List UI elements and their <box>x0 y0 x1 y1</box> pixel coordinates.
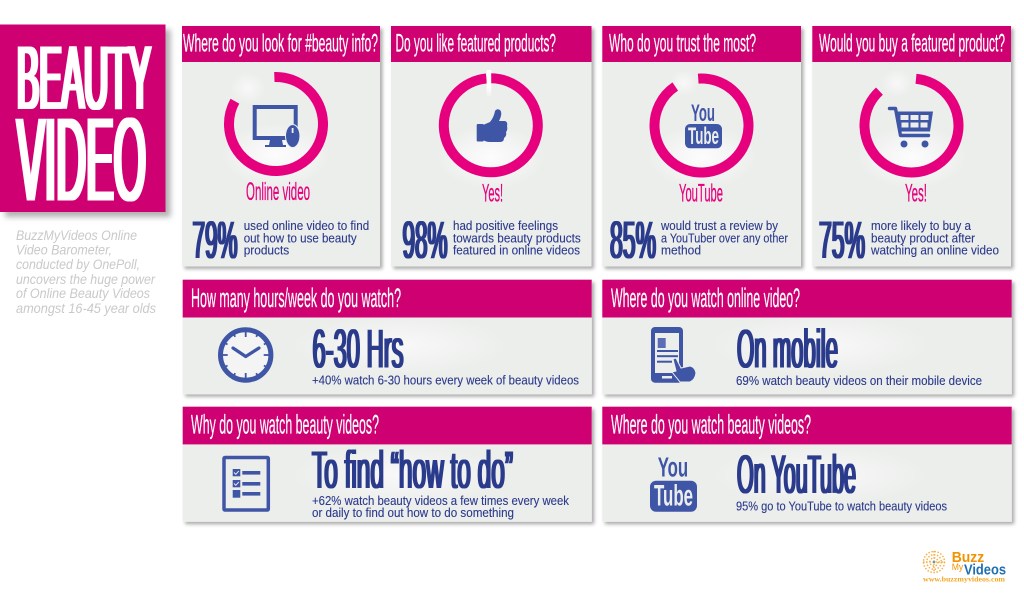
panel: do you like featured products <box>391 26 592 270</box>
icon: YouTube logo: Tube <box>654 480 693 513</box>
stat description: method <box>661 242 701 258</box>
stat description: beauty product after <box>871 230 976 246</box>
panel: where do you look for beauty info: Online video <box>246 178 310 206</box>
panel: where do you watch beauty videos <box>602 407 1012 522</box>
panel: where do you look for beauty info: 79% <box>192 211 238 270</box>
panel: who do you trust the most: Who do you trust the most? <box>609 30 756 58</box>
panel: where do you watch online video: On mobile <box>737 318 838 380</box>
icon: phone with tapping hand <box>651 327 696 383</box>
stat description: a YouTuber over any other <box>661 230 789 246</box>
donut ring 75% <box>860 74 963 177</box>
icon: YouTube logo: You <box>658 452 688 483</box>
stat description: +62% watch beauty videos a few times every week <box>312 493 569 508</box>
icon: dotted globe <box>923 551 945 573</box>
icon: YouTube logo <box>685 100 722 150</box>
panel: would you buy a featured product <box>812 26 1011 270</box>
logo: BuzzMyVideos <box>923 549 1006 584</box>
intro text: Video Barometer, <box>16 242 112 258</box>
icon: checklist <box>224 458 268 510</box>
intro text: uncovers the huge power <box>16 271 156 287</box>
panel: who do you trust the most <box>602 26 801 270</box>
stat description: products <box>244 242 290 258</box>
panel: do you like featured products: Do you like featured products? <box>396 30 556 58</box>
text: VIDEO <box>17 94 146 226</box>
stat description <box>660 218 789 258</box>
intro text: BuzzMyVideos Online <box>16 227 137 243</box>
stat description: +40% watch 6-30 hours every week of beauty videos <box>312 372 579 388</box>
stat description: towards beauty products <box>453 230 581 246</box>
title block <box>0 24 166 226</box>
stat description: watching an online video <box>870 242 999 258</box>
panel: how many hours per week: How many hours/week do you watch? <box>191 283 401 313</box>
stat description <box>870 218 999 258</box>
donut ring 85% <box>651 75 752 176</box>
icon: YouTube logo <box>650 452 697 513</box>
panel: who do you trust the most: YouTube <box>679 180 723 208</box>
logo: BuzzMyVideos: www.buzzmyvideos.com <box>923 575 1006 584</box>
intro text: amongst 16-45 year olds <box>16 300 156 316</box>
stat description: 69% watch beauty videos on their mobile device <box>736 373 982 388</box>
panel: where do you look for beauty info <box>182 26 380 270</box>
panel: do you like featured products: 98% <box>402 211 448 270</box>
intro text: conducted by OnePoll, <box>16 256 140 272</box>
logo: BuzzMyVideos: Videos <box>964 561 1006 578</box>
panel: how many hours per week: 6-30 Hrs <box>312 318 404 380</box>
panel: why do you watch beauty videos: To find “how to do” <box>312 441 513 500</box>
icon: YouTube logo: You <box>691 100 715 127</box>
text: BEAUTY <box>17 28 151 129</box>
panel: would you buy a featured product: Yes! <box>905 180 927 208</box>
donut ring 79% <box>227 75 325 173</box>
stat description: would trust a review by <box>660 218 778 233</box>
stat description: had positive feelings <box>453 218 558 233</box>
stat description: 95% go to YouTube to watch beauty videos <box>736 498 947 514</box>
icon: clock <box>220 330 271 380</box>
logo: BuzzMyVideos: Buzz <box>952 549 984 566</box>
icon: computer monitor and mouse <box>255 107 300 148</box>
panel: who do you trust the most: 85% <box>610 211 656 270</box>
panel: do you like featured products: Yes! <box>482 180 503 208</box>
stat description <box>453 218 581 258</box>
stat description <box>312 493 569 520</box>
panel: why do you watch beauty videos: Why do you watch beauty videos? <box>191 410 379 440</box>
intro text <box>16 227 156 316</box>
panel: how many hours per week <box>183 280 592 394</box>
stat description: out how to use beauty <box>244 230 357 246</box>
stat description: more likely to buy a <box>871 218 972 233</box>
icon: thumbs up <box>477 109 507 142</box>
logo: BuzzMyVideos: My <box>952 562 964 572</box>
stat description <box>244 218 369 258</box>
panel: would you buy a featured product: 75% <box>819 211 865 270</box>
text: Where do you look for #beauty info? <box>183 30 378 58</box>
icon: shopping cart <box>890 108 933 148</box>
stat description: or daily to find out how to do something <box>312 505 514 520</box>
panel: where do you watch online video: Where do you watch online video? <box>611 283 800 313</box>
panel: why do you watch beauty videos <box>183 407 592 522</box>
panel: where do you watch online video <box>602 280 1012 394</box>
donut ring 98% <box>444 78 538 172</box>
stat description: used online video to find <box>244 218 369 233</box>
icon: YouTube logo: Tube <box>688 123 719 150</box>
intro text: of Online Beauty Videos <box>16 285 150 301</box>
stat description: featured in online videos <box>453 242 580 258</box>
